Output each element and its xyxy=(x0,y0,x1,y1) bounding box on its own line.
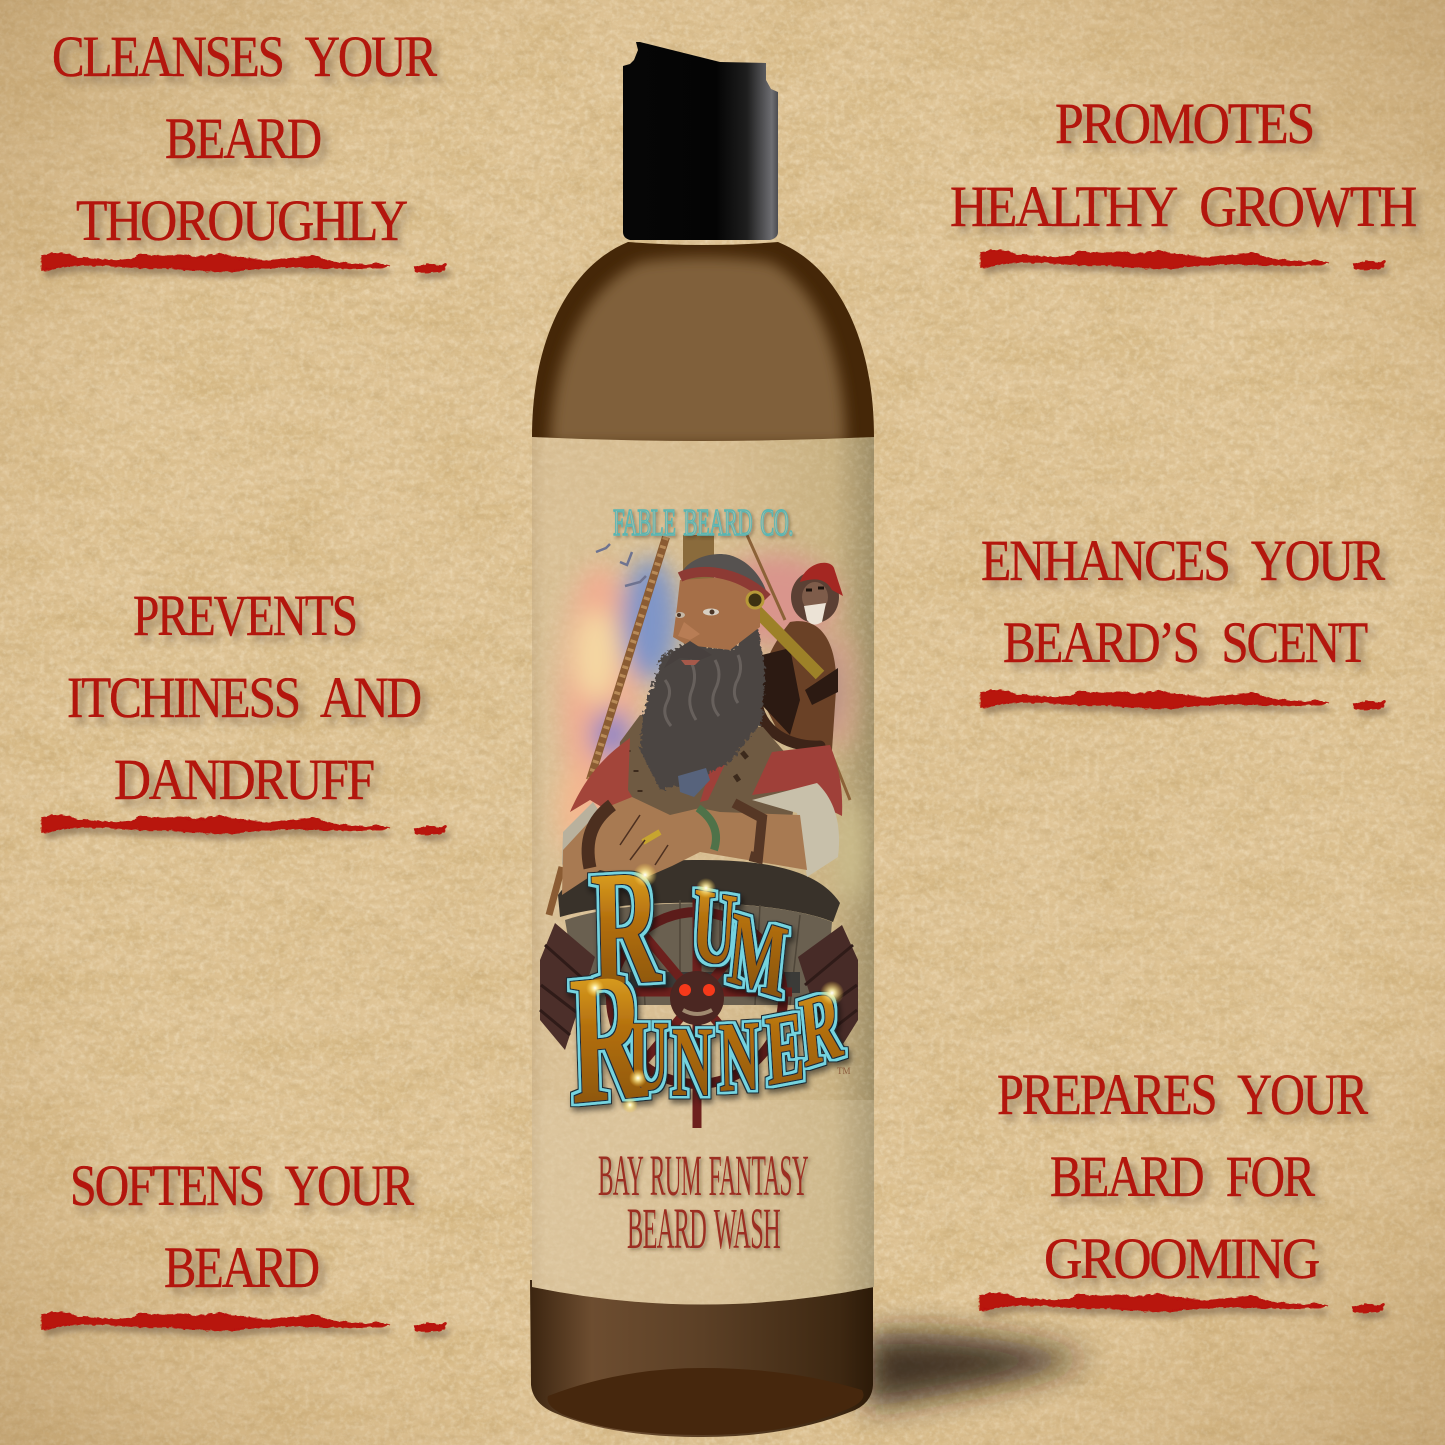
beard xyxy=(640,623,765,790)
callout text: BEARD FOR xyxy=(1050,1144,1315,1209)
label paper texture xyxy=(530,435,876,1315)
monkey xyxy=(757,563,843,750)
callout: enhances your beard's scent xyxy=(981,528,1385,709)
monkey face xyxy=(802,582,828,612)
callout: softens your beard xyxy=(42,1153,445,1331)
torn red underline xyxy=(42,815,445,834)
right red sleeve xyxy=(752,745,842,816)
callout: prepares your beard for grooming xyxy=(980,1062,1383,1312)
logo word two: E xyxy=(763,990,807,1107)
far eye xyxy=(675,612,685,618)
beard curls xyxy=(665,655,741,726)
callout text xyxy=(981,528,1385,675)
callout text: ITCHINESS AND xyxy=(67,665,421,730)
monkey eyes xyxy=(806,588,824,590)
rope twist highlight xyxy=(590,537,666,780)
finger lines xyxy=(620,815,668,865)
logo: Rum Runner xyxy=(568,835,847,1144)
wheel spokes xyxy=(605,885,792,1128)
ship wheel and skull xyxy=(605,885,792,1128)
eye xyxy=(703,608,719,616)
icon: black flip-top cap xyxy=(623,42,778,240)
logo word two: R xyxy=(568,932,649,1144)
callout text: PREPARES YOUR xyxy=(997,1062,1368,1127)
far eye pupil xyxy=(677,613,681,617)
logo word two: U xyxy=(628,1000,669,1111)
logo word one: U xyxy=(689,866,740,989)
logo word two: N xyxy=(718,1000,760,1113)
bottle shoulder inner glow xyxy=(550,257,846,445)
logo word one: M xyxy=(724,889,792,1021)
callout text: SOFTENS YOUR xyxy=(70,1153,414,1218)
callout text: BEARD xyxy=(165,106,321,171)
spyglass ring xyxy=(747,592,763,608)
callout text: ENHANCES YOUR xyxy=(981,528,1385,593)
birds xyxy=(596,544,646,586)
callout text: THOROUGHLY xyxy=(76,188,407,253)
skull teeth xyxy=(683,1010,712,1014)
product label xyxy=(532,437,874,1304)
lower rope xyxy=(549,867,562,915)
callout text: PROMOTES xyxy=(1055,91,1313,156)
white right sleeve xyxy=(752,783,839,877)
bottle shoulder xyxy=(532,242,874,445)
logo word one: R xyxy=(589,835,663,1022)
skull cap xyxy=(680,554,767,594)
leather strap and buckle xyxy=(734,803,762,858)
callout: cleanses your beard thoroughly xyxy=(42,24,445,272)
bottle base xyxy=(530,1280,873,1437)
right side barrel xyxy=(798,925,858,1057)
left red sleeve xyxy=(570,738,640,815)
bottle cast shadow xyxy=(865,1333,1090,1408)
forearms and hands xyxy=(562,797,807,895)
callout text xyxy=(67,583,421,812)
red shirt xyxy=(700,762,726,802)
callout text xyxy=(70,1153,414,1300)
monkey head xyxy=(791,571,839,623)
lips xyxy=(681,660,700,665)
callout text: GROOMING xyxy=(1044,1226,1319,1291)
torn red underline xyxy=(980,1293,1383,1312)
head xyxy=(673,577,760,650)
callout text: PREVENTS xyxy=(133,583,356,648)
text: BEARD WASH xyxy=(627,1196,780,1261)
torn red underline xyxy=(42,253,445,272)
callout text: BEARD’S SCENT xyxy=(1003,610,1368,675)
barrel hoop xyxy=(630,972,800,993)
green wristband xyxy=(698,808,716,850)
moustache xyxy=(664,641,712,668)
spyglass xyxy=(750,604,820,675)
monkey mouth xyxy=(804,603,826,625)
brand name: FABLE BEARD CO. xyxy=(613,502,793,544)
coat buttons xyxy=(628,750,747,792)
rope xyxy=(590,537,666,780)
rigging lines xyxy=(747,535,850,800)
sky glow xyxy=(559,555,864,905)
gold ring xyxy=(643,832,660,842)
skull hub xyxy=(670,971,724,1025)
callout text: DANDRUFF xyxy=(114,747,374,812)
monkey tail xyxy=(757,692,820,746)
callout: promotes healthy growth xyxy=(950,91,1416,269)
nose xyxy=(678,622,700,640)
torn red underline xyxy=(981,690,1384,709)
amber liquid at bottle base xyxy=(548,1368,864,1435)
callout text xyxy=(997,1062,1368,1291)
barrel body xyxy=(565,903,832,1005)
logo word two: N xyxy=(672,1006,712,1117)
trademark: TM xyxy=(837,1066,850,1076)
text: BAY RUM FANTASY xyxy=(598,1143,808,1208)
headband xyxy=(680,572,767,598)
callout text: BEARD xyxy=(164,1235,319,1300)
pirate coat xyxy=(612,715,800,830)
callout: prevents itchiness and dandruff xyxy=(42,583,445,834)
mast xyxy=(683,535,714,585)
bottle xyxy=(530,42,876,1437)
skull eyes xyxy=(679,984,715,996)
barrel planks xyxy=(600,900,800,1005)
left barrel stripes xyxy=(540,945,590,1035)
label product name xyxy=(598,1143,808,1261)
wrist bracelets xyxy=(588,805,612,868)
logo word two: R xyxy=(796,967,847,1089)
label illustration: pirate and monkey xyxy=(540,535,864,1128)
monkey dark arms xyxy=(762,648,838,735)
logo sparkles xyxy=(586,863,844,1113)
callout text xyxy=(950,91,1416,239)
monkey body xyxy=(761,621,836,750)
callout text: CLEANSES YOUR xyxy=(52,24,437,89)
white left sleeve xyxy=(562,802,600,865)
torn red underline xyxy=(42,1312,445,1331)
left side barrel xyxy=(540,923,595,1050)
barrel top rim xyxy=(558,860,840,922)
medallion xyxy=(678,768,710,797)
right barrel stripes xyxy=(805,945,857,1035)
callout text xyxy=(52,24,437,253)
eye pupil xyxy=(710,610,714,614)
torn red underline xyxy=(981,250,1384,269)
wheel ring xyxy=(611,912,783,1084)
monkey bandana xyxy=(800,563,843,596)
